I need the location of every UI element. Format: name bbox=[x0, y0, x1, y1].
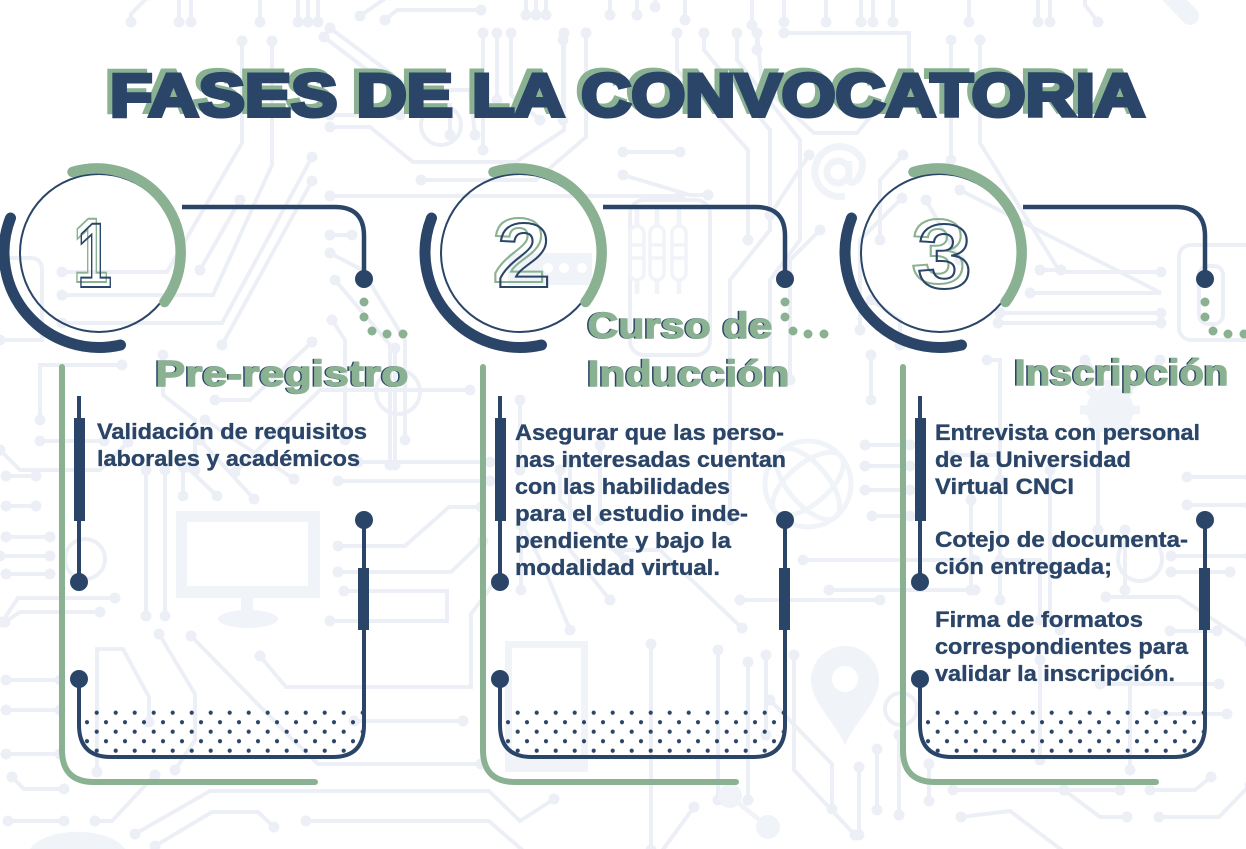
panel: fase 1 bbox=[4, 168, 408, 782]
text: fase 1 bbox=[97, 419, 367, 471]
text: fase 3: correspondientes para bbox=[935, 634, 1189, 659]
heading: Curso de Inducción: Curso de bbox=[588, 305, 772, 346]
heading: Inscripción: Inscripción bbox=[1014, 352, 1228, 393]
number badge 3 bbox=[845, 168, 1022, 347]
text: fase 2: pendiente y bajo la bbox=[515, 528, 732, 553]
number badge 3: 3 bbox=[917, 206, 972, 308]
card frame 1 bbox=[62, 367, 373, 782]
icon: molecule nodes bbox=[718, 784, 780, 839]
heading: Pre-registro: Pre-registro bbox=[156, 353, 408, 394]
text: fase 2: Asegurar que las perso- bbox=[515, 420, 784, 445]
heading: Curso de Inducción: Curso de bbox=[586, 305, 771, 346]
number badge 3: 3 bbox=[911, 201, 966, 303]
text: fase 2: modalidad virtual. bbox=[515, 555, 720, 580]
text: fase 2: para el estudio inde- bbox=[515, 501, 748, 526]
text: fase 1: Validación de requisitos bbox=[97, 419, 367, 444]
text: fase 3: ción entregada; bbox=[935, 554, 1112, 579]
card frame 2 bbox=[483, 367, 794, 782]
text: fase 2: nas interesadas cuentan bbox=[515, 447, 786, 472]
text: fase 2 bbox=[515, 420, 786, 580]
panel: fase 2 bbox=[425, 168, 828, 782]
panel: fase 3 bbox=[845, 168, 1246, 782]
icon: globe bbox=[762, 438, 854, 530]
icon: tablet bbox=[505, 641, 588, 772]
card frame 3 bbox=[903, 367, 1214, 782]
icon: resistors bbox=[630, 208, 686, 294]
icon: monitor bbox=[176, 511, 320, 628]
heading: Curso de Inducción: Inducción bbox=[586, 353, 788, 394]
number badge 2: 2 bbox=[492, 200, 546, 302]
text: fase 3: Virtual CNCI bbox=[935, 474, 1074, 499]
text: fase 3: Entrevista con personal bbox=[935, 420, 1200, 445]
title: FASES DE LA CONVOCATORIA bbox=[105, 58, 1140, 125]
icon: map pin bbox=[811, 646, 879, 745]
icon: chat box bbox=[508, 253, 592, 285]
heading: Curso de Inducción bbox=[586, 305, 790, 394]
number badge 1: 1 bbox=[77, 205, 112, 307]
text: fase 3 bbox=[935, 420, 1200, 686]
text: fase 1: laborales y académicos bbox=[97, 446, 360, 471]
heading: Pre-registro: Pre-registro bbox=[154, 353, 407, 394]
text: fase 3: Cotejo de documenta- bbox=[935, 527, 1188, 552]
number badge 2: 2 bbox=[497, 205, 551, 307]
connector line with dots bbox=[603, 207, 828, 338]
heading: Inscripción: Inscripción bbox=[1013, 352, 1227, 393]
text: fase 3: validar la inscripción. bbox=[935, 661, 1175, 686]
connector line with dots bbox=[182, 207, 408, 338]
icon: gear bbox=[1080, 380, 1140, 440]
number badge 1: 1 bbox=[73, 200, 108, 302]
text: fase 2: con las habilidades bbox=[515, 474, 730, 499]
icon: arc bottom left bbox=[30, 832, 125, 849]
number badge 1 bbox=[4, 168, 181, 347]
icon: capsule top right bbox=[1170, 0, 1190, 16]
connector line with dots bbox=[1023, 207, 1246, 338]
text: fase 3: Firma de formatos bbox=[935, 607, 1143, 632]
title: FASES DE LA CONVOCATORIA bbox=[110, 62, 1145, 129]
number badge 2 bbox=[425, 168, 602, 347]
text: fase 3: de la Universidad bbox=[935, 447, 1131, 472]
heading: Curso de Inducción: Inducción bbox=[588, 353, 790, 394]
icon: at sign bbox=[815, 147, 862, 197]
background: decorative circles bbox=[65, 105, 1246, 725]
